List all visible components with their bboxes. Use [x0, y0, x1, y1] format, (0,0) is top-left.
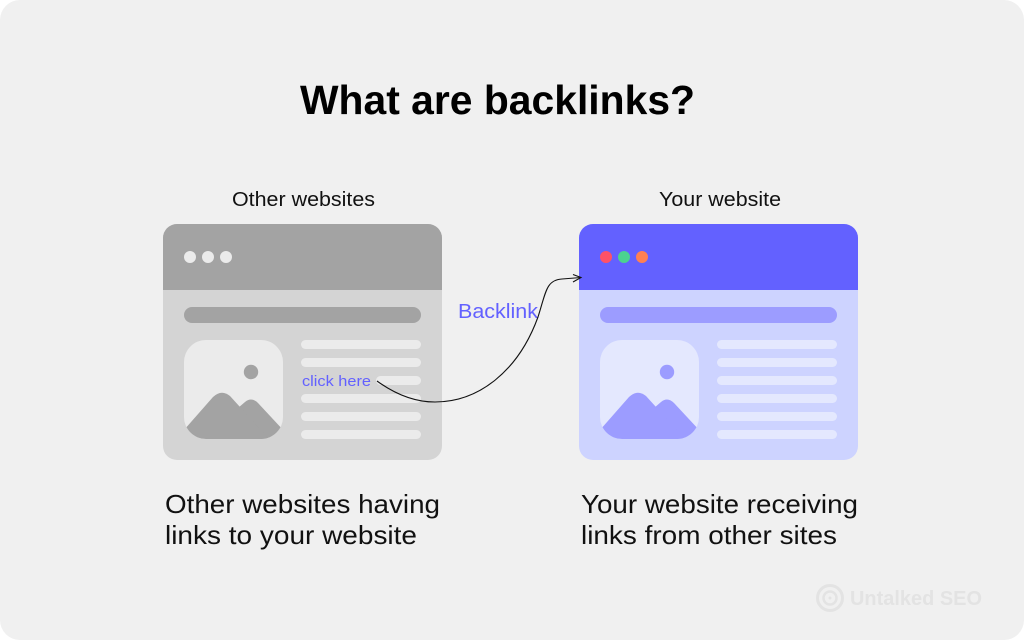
window dots	[600, 251, 648, 263]
window dots	[184, 251, 232, 263]
watermark text: Untalked SEO	[850, 588, 982, 610]
heading placeholder bar	[600, 307, 837, 323]
click here link: click here	[302, 373, 371, 390]
description: your website: links from other sites	[581, 520, 837, 550]
text placeholder lines	[301, 340, 421, 439]
arrow: backlink curve	[377, 274, 581, 402]
label: other websites: Other websites	[232, 189, 375, 211]
panel: other website browser window	[163, 224, 442, 460]
image placeholder icon	[184, 340, 284, 440]
description: your website: Your website receiving	[581, 489, 858, 519]
watermark: Untalked SEO	[818, 586, 982, 610]
heading placeholder bar	[184, 307, 421, 323]
browser body	[163, 224, 442, 460]
text placeholder lines	[717, 340, 837, 439]
browser header bar	[163, 224, 442, 290]
image placeholder icon	[600, 340, 700, 440]
label: your website: Your website	[659, 189, 781, 211]
panel: your website browser window	[579, 224, 858, 460]
title: What are backlinks?	[300, 77, 695, 123]
description: other websites: links to your website	[165, 520, 417, 550]
browser body	[579, 224, 858, 460]
description: other websites: Other websites having	[165, 489, 440, 519]
icon: target logo	[818, 586, 842, 610]
browser header bar	[579, 224, 858, 290]
backlink label: Backlink	[458, 301, 539, 323]
